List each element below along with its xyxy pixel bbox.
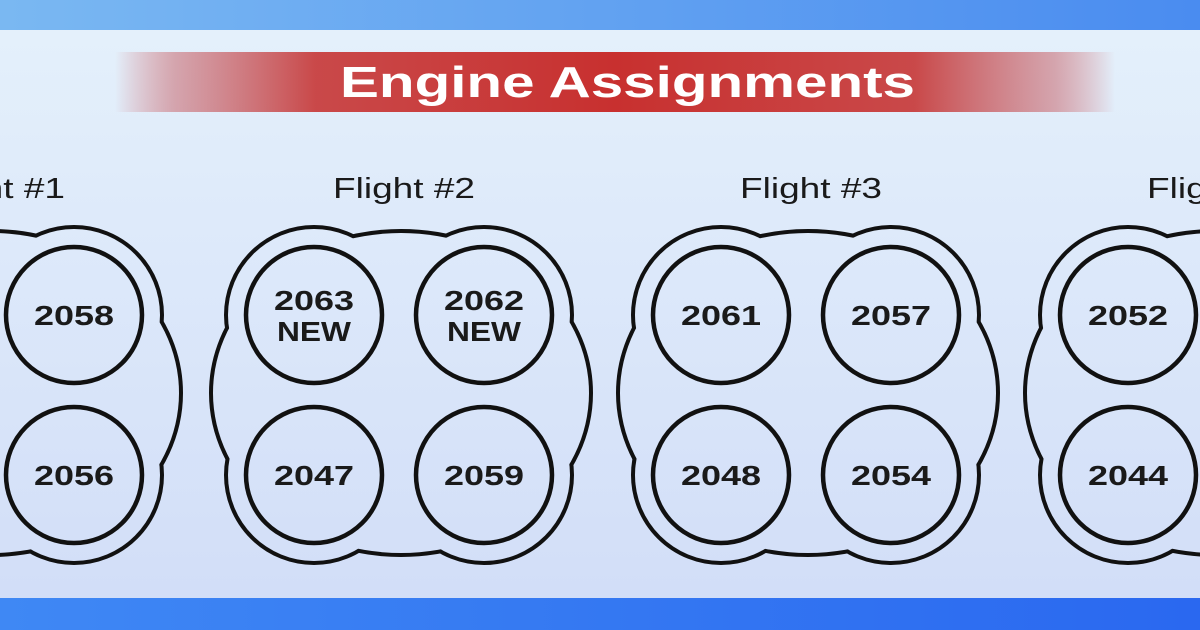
panel: flight 4: 2044 [1088,460,1169,491]
panel: flight 1 [0,173,179,561]
title [115,52,1115,112]
panel: flight 2: 2047 [274,460,354,491]
panel: flight 3: 2048 [681,460,761,491]
panel: flight 3: 2061 [681,300,761,331]
panel: flight 3 [620,173,996,561]
panel: flight 2: NEW [447,316,522,347]
panel: flight 1: 2056 [34,460,114,491]
panel: flight 4 [1027,173,1200,561]
title: Engine Assignments [340,58,915,107]
label: flight 3: Flight #3 [740,173,882,205]
panel: flight 1: 2058 [34,300,114,331]
panel: flight 2 [213,173,589,561]
panel: flight 4: 2052 [1088,300,1168,331]
label: flight 2: Flight #2 [333,173,475,205]
panel: flight 3: 2054 [851,460,932,491]
panel: flight 2: 2063 [274,285,354,316]
panel: flight 3: 2057 [851,300,931,331]
panel: flight 2: 2059 [444,460,524,491]
panel: flight 2: NEW [277,316,352,347]
panel: flight 2: 2062 [444,285,524,316]
